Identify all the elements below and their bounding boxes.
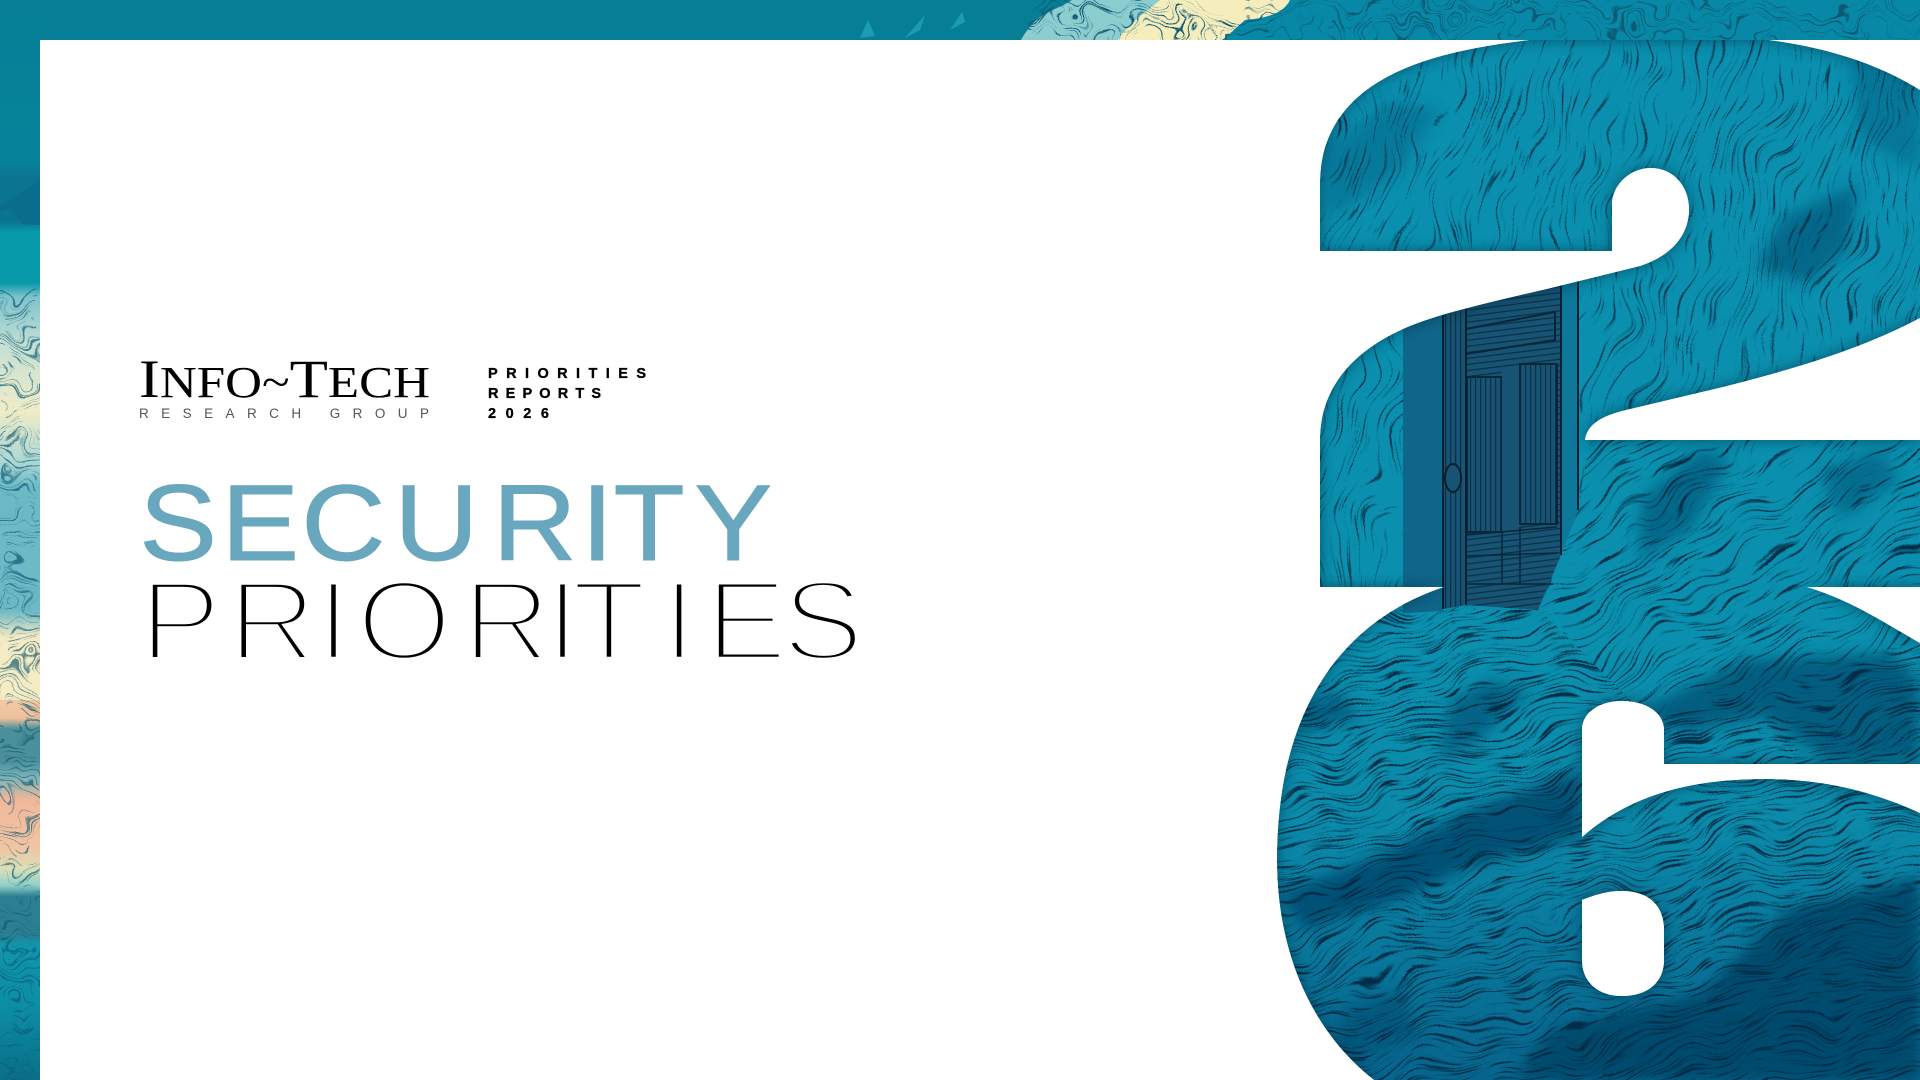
- big 26 numeral filled with illustration: [1277, 40, 1920, 1080]
- lower door rails: [1466, 527, 1557, 584]
- right door panel: [1520, 364, 1557, 524]
- door and wooden wall: [1403, 281, 1578, 613]
- hatching: upper numeral: [1600, 250, 1602, 252]
- logo tagline: RESEARCH GROUP: [139, 406, 429, 421]
- middle door stile: [1502, 368, 1520, 532]
- door body: [1466, 284, 1561, 610]
- logo: Info-Tech Research Group: [139, 349, 430, 421]
- top border band: [0, 0, 1920, 40]
- inner shadow of numeral cut-out: [1277, 40, 1920, 1078]
- door knob: [1445, 464, 1461, 492]
- report series label: [488, 366, 646, 422]
- report series label: REPORTS: [488, 386, 601, 402]
- title: Security: SECURITY: [139, 462, 772, 583]
- door wall strip: [1403, 312, 1443, 613]
- logo wordmark: INFO~ TECH: [139, 349, 430, 409]
- numeral base colour: [1270, 40, 1920, 1080]
- upper door panels: [1466, 312, 1555, 354]
- title: Priorities: PRIORITIES: [139, 558, 864, 685]
- hatching: lower numeral: [1600, 800, 1602, 802]
- left door panel: [1467, 377, 1502, 532]
- door frame right: [1561, 281, 1578, 555]
- hatching: middle slope: [1700, 559, 1703, 562]
- report series label: PRIORITIES: [488, 366, 646, 382]
- shaded terrain patches: [1281, 60, 1920, 1080]
- door frame left: [1443, 306, 1466, 609]
- left border band: [0, 0, 40, 1080]
- report series label: 2026: [488, 406, 549, 422]
